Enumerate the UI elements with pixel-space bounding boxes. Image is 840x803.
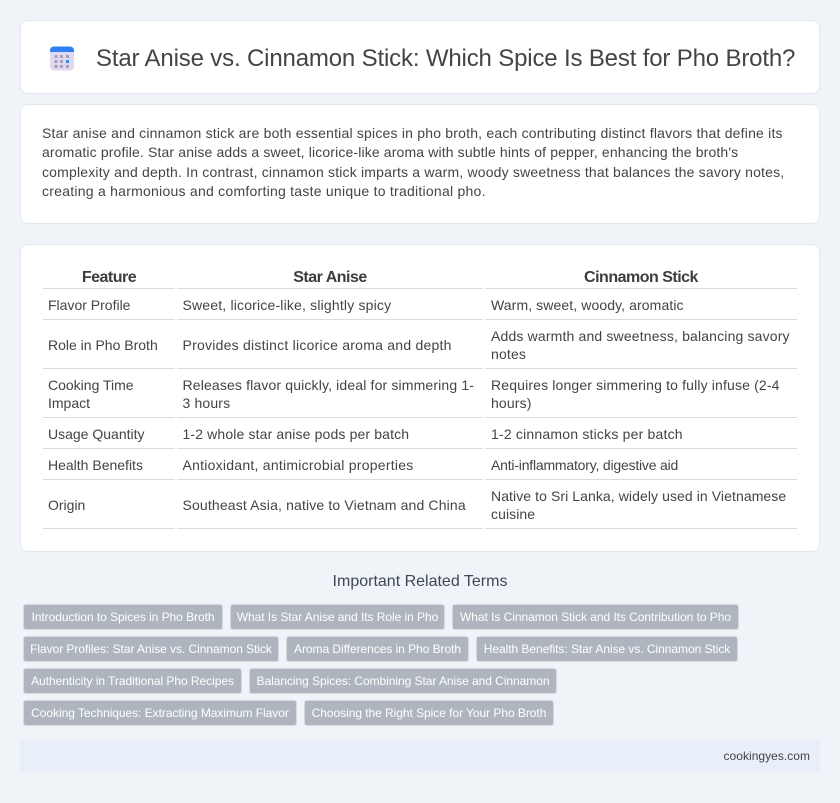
row: role in pho broth: Provides distinct licorice aroma and depth	[182, 337, 452, 353]
row: cooking time impact	[43, 377, 797, 418]
related terms chips: Health Benefits: Star Anise vs. Cinnamon Stick	[484, 642, 730, 656]
row: origin: Origin	[48, 497, 85, 513]
row: usage quantity: 1-2 cinnamon sticks per batch	[491, 426, 683, 442]
row: usage quantity: 1-2 whole star anise pods per batch	[182, 426, 409, 442]
row: cooking time impact: Requires longer simmering to fully infuse (2-4	[491, 377, 780, 393]
panel: title header	[20, 20, 820, 94]
related terms chips: What Is Star Anise and Its Role in Pho	[237, 610, 438, 624]
row: role in pho broth: Role in Pho Broth	[48, 337, 158, 353]
row: flavor profile	[43, 297, 797, 320]
intro paragraph: Star anise and cinnamon stick are both essential spices in pho broth, each contributing distinct flavors that define its	[42, 125, 783, 141]
related terms chips: Flavor Profiles: Star Anise vs. Cinnamon Stick	[30, 642, 272, 656]
table header	[43, 269, 797, 289]
panel: introduction text	[20, 104, 820, 224]
related terms chips: What Is Cinnamon Stick and Its Contribution to Pho	[460, 610, 731, 624]
row: cooking time impact: Impact	[48, 395, 90, 411]
footer source text: cookingyes.com	[724, 749, 810, 763]
intro paragraph	[42, 125, 784, 199]
row: usage quantity	[43, 426, 797, 449]
row: flavor profile: Sweet, licorice-like, slightly spicy	[182, 297, 391, 313]
row: health benefits: Antioxidant, antimicrobial properties	[182, 457, 414, 473]
icon: calendar	[50, 46, 74, 70]
row: cooking time impact: 3 hours	[182, 395, 230, 411]
related terms chips: Introduction to Spices in Pho Broth	[31, 610, 215, 624]
row: origin	[43, 488, 797, 529]
row: flavor profile: Warm, sweet, woody, aromatic	[491, 297, 684, 313]
row: cooking time impact: hours)	[491, 395, 532, 411]
comparison table	[43, 269, 797, 529]
table header: Feature	[82, 269, 136, 286]
intro paragraph: aromatic profile. Star anise adds a sweet, licorice-like aroma with subtle hints of pepper, enhancing the broth's	[42, 144, 738, 160]
related terms chips: Authenticity in Traditional Pho Recipes	[31, 674, 234, 688]
related terms chips: Cooking Techniques: Extracting Maximum Flavor	[31, 706, 289, 720]
row: cooking time impact: Cooking Time	[48, 377, 134, 393]
row: origin: cuisine	[491, 506, 535, 522]
table header: Cinnamon Stick	[584, 269, 698, 286]
intro paragraph: complexity and depth. In contrast, cinnamon stick imparts a warm, woody sweetness that balances the savory notes,	[42, 164, 784, 180]
title: Star Anise vs. Cinnamon Stick: Which Spice Is Best for Pho Broth?	[96, 45, 795, 72]
row: health benefits: Health Benefits	[48, 457, 143, 473]
row: health benefits: Anti-inflammatory, digestive aid	[491, 457, 678, 473]
related terms chips: Aroma Differences in Pho Broth	[294, 642, 461, 656]
row: role in pho broth: Adds warmth and sweetness, balancing savory	[491, 328, 790, 344]
related terms chips: Balancing Spices: Combining Star Anise and Cinnamon	[257, 674, 549, 688]
related terms chips	[23, 604, 739, 726]
related terms chips: Choosing the Right Spice for Your Pho Broth	[312, 706, 546, 720]
row: flavor profile: Flavor Profile	[48, 297, 130, 313]
row: role in pho broth: notes	[491, 346, 526, 362]
row: role in pho broth	[43, 328, 797, 369]
panel: comparison table	[20, 244, 820, 552]
row: origin: Southeast Asia, native to Vietnam and China	[182, 497, 466, 513]
table header: Star Anise	[293, 269, 367, 286]
intro paragraph: creating a harmonious and comforting taste unique to traditional pho.	[42, 183, 486, 199]
row: health benefits	[43, 457, 797, 480]
row: cooking time impact: Releases flavor quickly, ideal for simmering 1-	[182, 377, 474, 393]
row: usage quantity: Usage Quantity	[48, 426, 144, 442]
heading: important related terms: Important Related Terms	[333, 573, 507, 590]
footer	[20, 739, 820, 773]
row: origin: Native to Sri Lanka, widely used in Vietnamese	[491, 488, 786, 504]
